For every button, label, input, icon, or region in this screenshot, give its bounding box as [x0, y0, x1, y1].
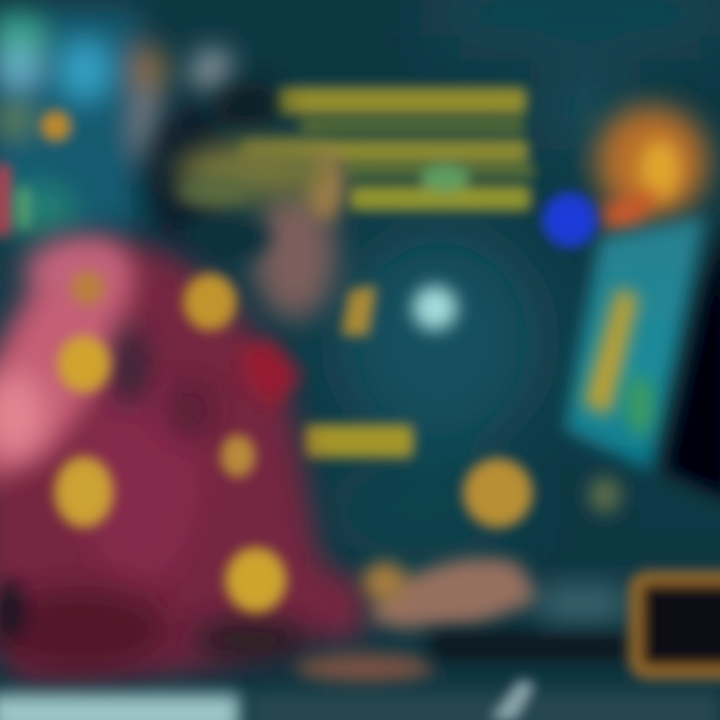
icon: orange blob top right [596, 106, 708, 232]
person: arm and hand on keyboard [295, 558, 540, 682]
icon: blue circle [543, 193, 597, 247]
button: yellow bar [305, 425, 413, 457]
panel: top-left colour screen [0, 10, 232, 320]
person: hair and head [148, 81, 345, 320]
background glow: centre screen [320, 0, 720, 560]
icon: orange coin [464, 459, 532, 527]
icons: top-left small markers [0, 111, 71, 235]
text block: yellow headline bars [240, 88, 535, 210]
panel: tilted teal card [565, 216, 705, 470]
icon: pale glowing dot [413, 286, 457, 330]
icons: yellow coins on hoodie [55, 271, 286, 612]
person: hoodie body [0, 238, 370, 680]
monitor edge: black right side [665, 215, 720, 500]
icon: centre yellow marker [342, 286, 376, 335]
desk: keyboard and base [0, 585, 720, 720]
icon: orange frame bottom right [636, 578, 720, 672]
icon: small olive marker [589, 477, 621, 513]
